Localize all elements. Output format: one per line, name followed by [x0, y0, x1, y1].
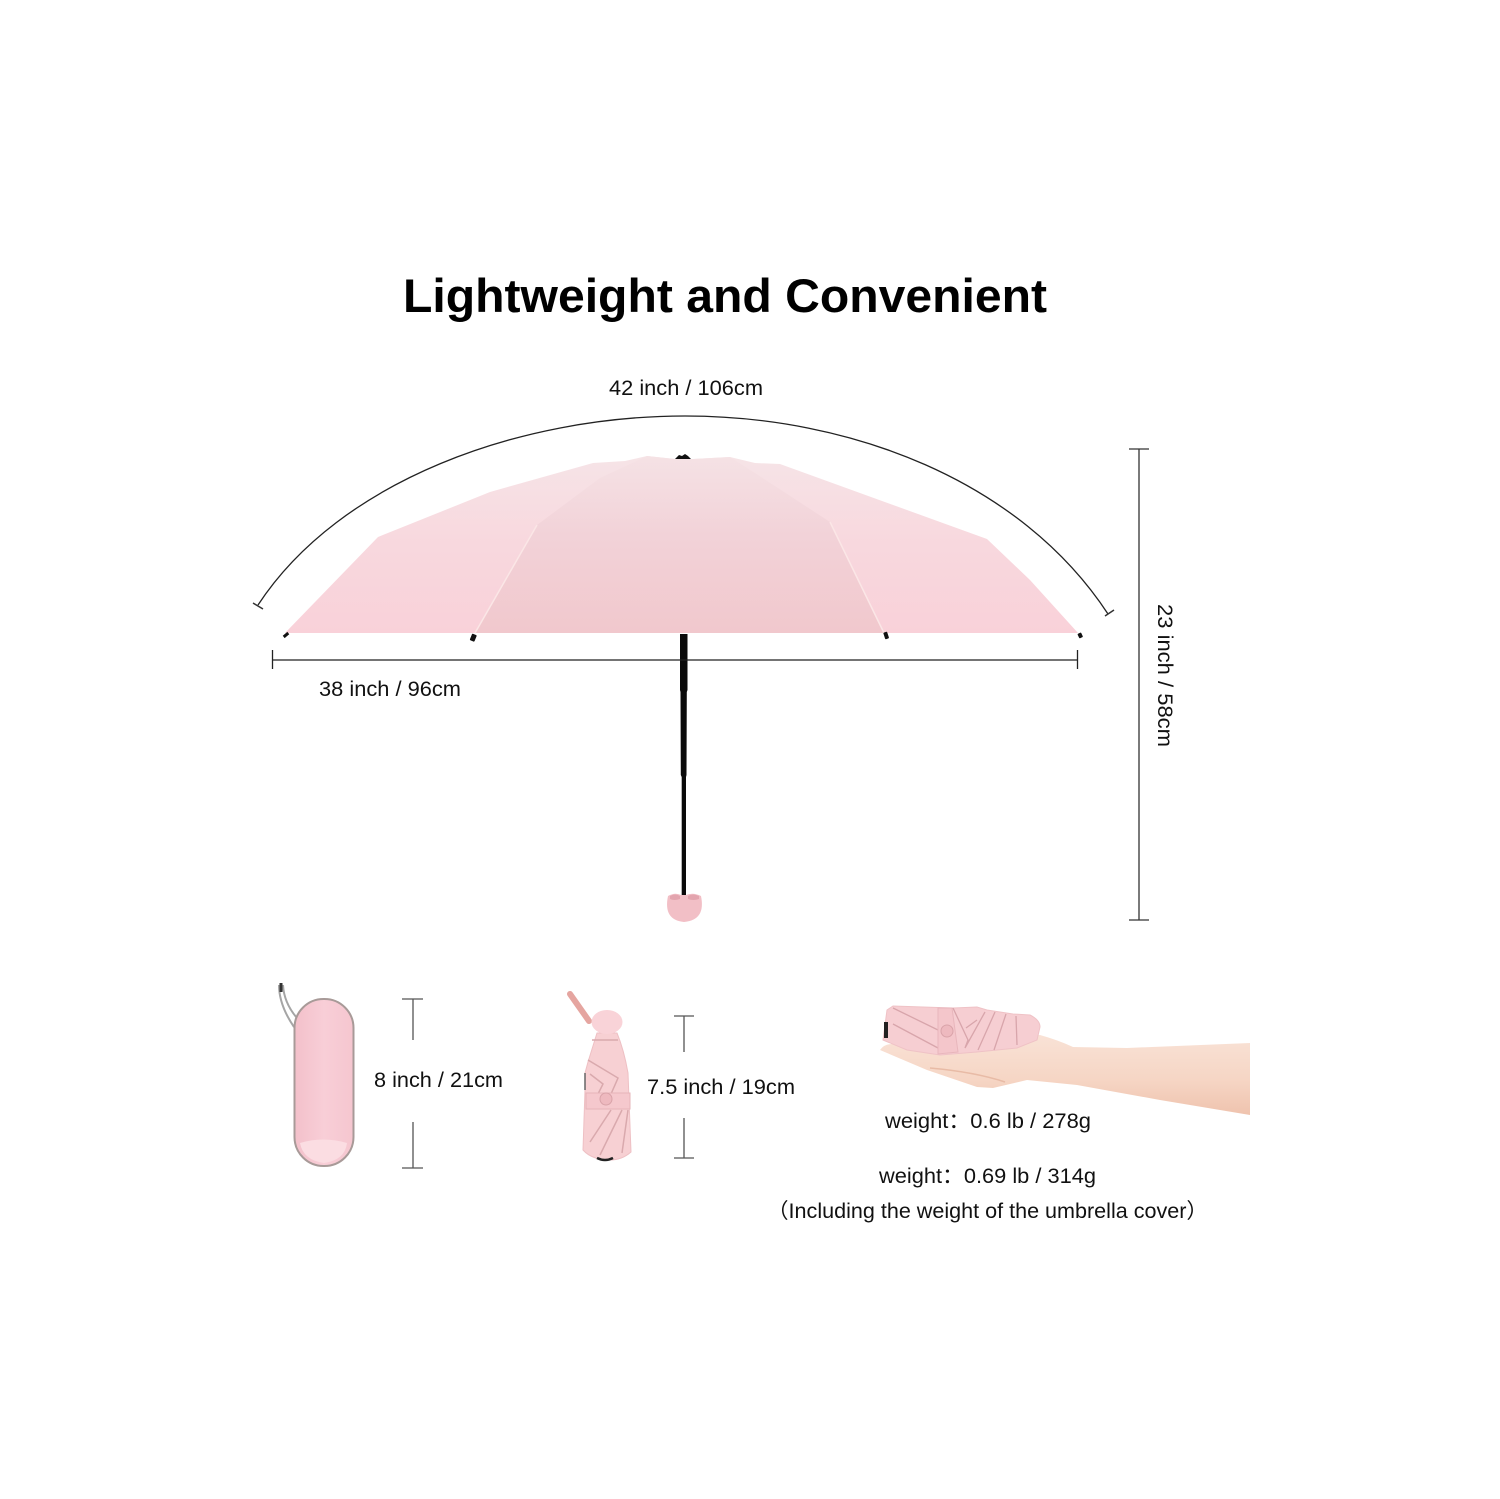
umbrella case [279, 983, 354, 1166]
dimension: arc width [253, 377, 1114, 616]
weight without cover: weight：0.6 lb / 278g [884, 1110, 1091, 1133]
shaft [680, 634, 688, 895]
case strap [279, 985, 297, 1027]
dimension: straight width [272, 650, 1078, 701]
dimension: height [1129, 449, 1176, 920]
arm and hand [880, 1035, 1250, 1115]
dimension: case length [374, 999, 503, 1168]
open umbrella [283, 454, 1083, 922]
label: arc width: 42 inch / 106cm [609, 377, 763, 400]
hand holding umbrella [880, 1006, 1250, 1115]
label: height: 23 inch / 58cm [1153, 604, 1176, 747]
umbrella in hand [883, 1006, 1040, 1055]
folded body [583, 1033, 631, 1160]
folded band [586, 1093, 630, 1109]
case body [294, 999, 354, 1166]
weight text [767, 1110, 1208, 1223]
label: straight width: 38 inch / 96cm [319, 678, 461, 701]
folded umbrella [570, 994, 631, 1160]
title: Lightweight and Convenient [403, 269, 1047, 322]
folded strap [570, 994, 589, 1021]
dimension: folded length [647, 1016, 795, 1158]
label: folded length: 7.5 inch / 19cm [647, 1076, 795, 1099]
label: case length: 8 inch / 21cm [374, 1069, 503, 1092]
weight note: （Including the weight of the umbrella cover） [767, 1200, 1208, 1223]
canopy [285, 456, 1078, 633]
weight with cover: weight：0.69 lb / 314g [878, 1165, 1096, 1188]
rib tips [283, 454, 1083, 642]
folded cap [592, 1010, 622, 1034]
handle knob [667, 894, 702, 922]
